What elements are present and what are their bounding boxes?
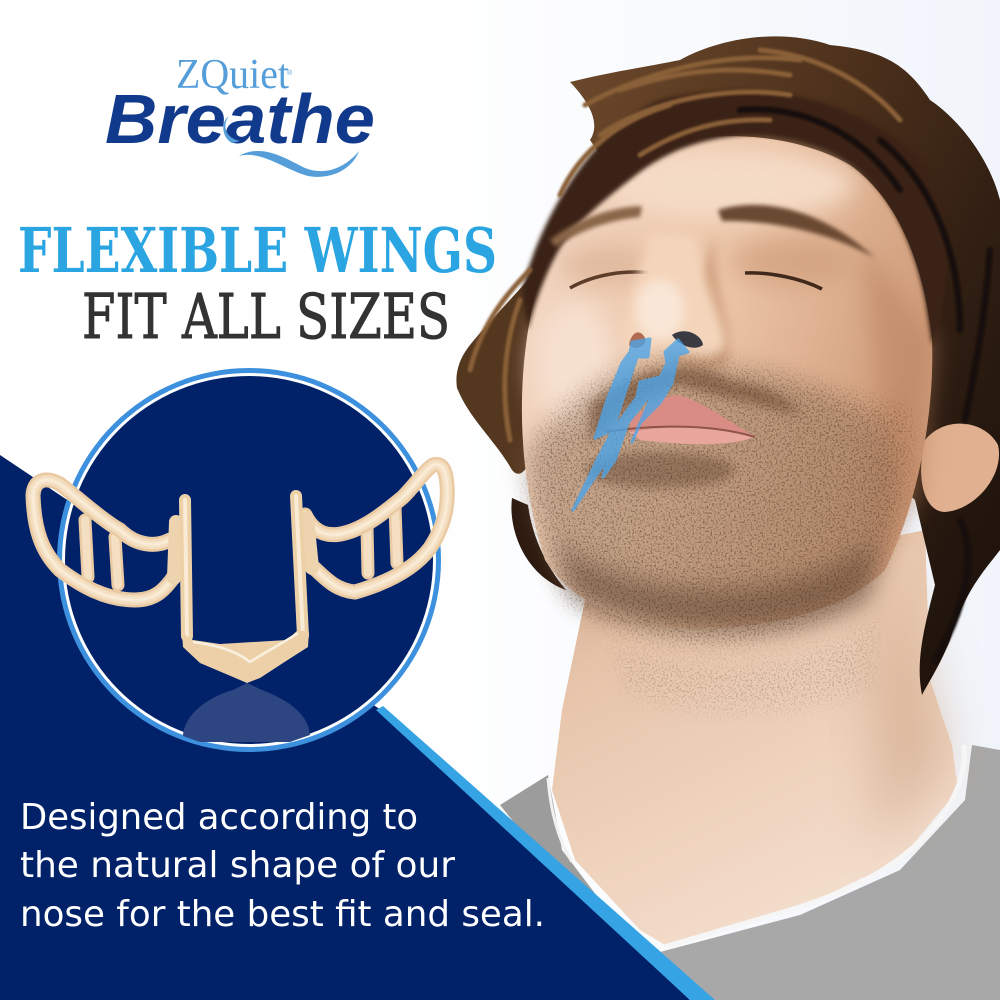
logo: a accent: [223, 116, 240, 143]
base highlight: [193, 633, 298, 662]
chin stubble patch: [585, 452, 735, 488]
mouth line: [605, 427, 755, 437]
hair dark strands: [740, 109, 990, 660]
line 1: Designed according to: [20, 797, 418, 838]
U frame arms: [185, 496, 303, 636]
forehead highlight: [605, 150, 855, 220]
hair mass: [570, 36, 1000, 695]
nostril left: [629, 332, 645, 348]
headline line 1: FLEXIBLE WINGS: [18, 214, 497, 287]
hair left side: [456, 260, 550, 474]
wing joints: [174, 518, 312, 578]
right eye socket shading: [730, 238, 850, 286]
logo: [105, 52, 375, 177]
stubble texture: [530, 359, 911, 645]
navy corner panel: [0, 455, 690, 1000]
light blue edge band: [376, 706, 715, 1000]
right cheek shading: [860, 240, 935, 560]
shirt: [500, 745, 1000, 1000]
cheek highlight: [533, 300, 617, 430]
hair lower left curl: [511, 498, 566, 590]
blue airflow arrows: [573, 339, 688, 510]
jaw shadow: [555, 540, 880, 633]
neck shading: [870, 560, 950, 850]
beard shadow: [525, 361, 896, 623]
right wing: [305, 464, 447, 592]
arrow left: [595, 339, 650, 438]
eye right: [745, 273, 822, 289]
description text: [20, 797, 545, 935]
left collar: [548, 778, 572, 862]
headline: [18, 214, 497, 353]
arrow lower: [573, 377, 660, 510]
moustache shadow: [590, 368, 800, 445]
face: [522, 136, 932, 628]
nostril right with insert: [672, 331, 703, 348]
eyebrow right: [718, 205, 875, 258]
photo: man breathing: [456, 36, 1000, 1000]
hair light strands: [470, 50, 900, 440]
nose: [622, 235, 724, 358]
device reflection: [183, 683, 310, 742]
eye left: [570, 272, 652, 288]
nose shadow: [670, 235, 729, 370]
ear: [921, 424, 999, 512]
eyebrow left: [550, 206, 642, 247]
left wing: [33, 480, 175, 600]
line 3: nose for the best fit and seal.: [20, 894, 545, 935]
circle badge: [57, 368, 441, 752]
logo: ZQuiet: ZQuiet: [176, 52, 289, 98]
neck: [552, 530, 958, 945]
line 2: the natural shape of our: [20, 845, 455, 886]
logo: wave: [239, 151, 359, 177]
headline line 2: FIT ALL SIZES: [82, 280, 450, 353]
shirt collar: [664, 745, 964, 947]
logo: registered mark: ®: [287, 69, 293, 77]
neck stubble: [610, 610, 880, 712]
nose device: [33, 464, 447, 742]
base plate: [182, 630, 309, 683]
logo: Breathe: Breathe: [105, 80, 375, 158]
arrow right: [632, 340, 688, 442]
lower lip: [630, 427, 755, 444]
left eye shading: [560, 245, 650, 285]
nose tip highlight: [636, 280, 684, 340]
upper lip: [630, 395, 755, 437]
hair fringe: [522, 90, 946, 345]
